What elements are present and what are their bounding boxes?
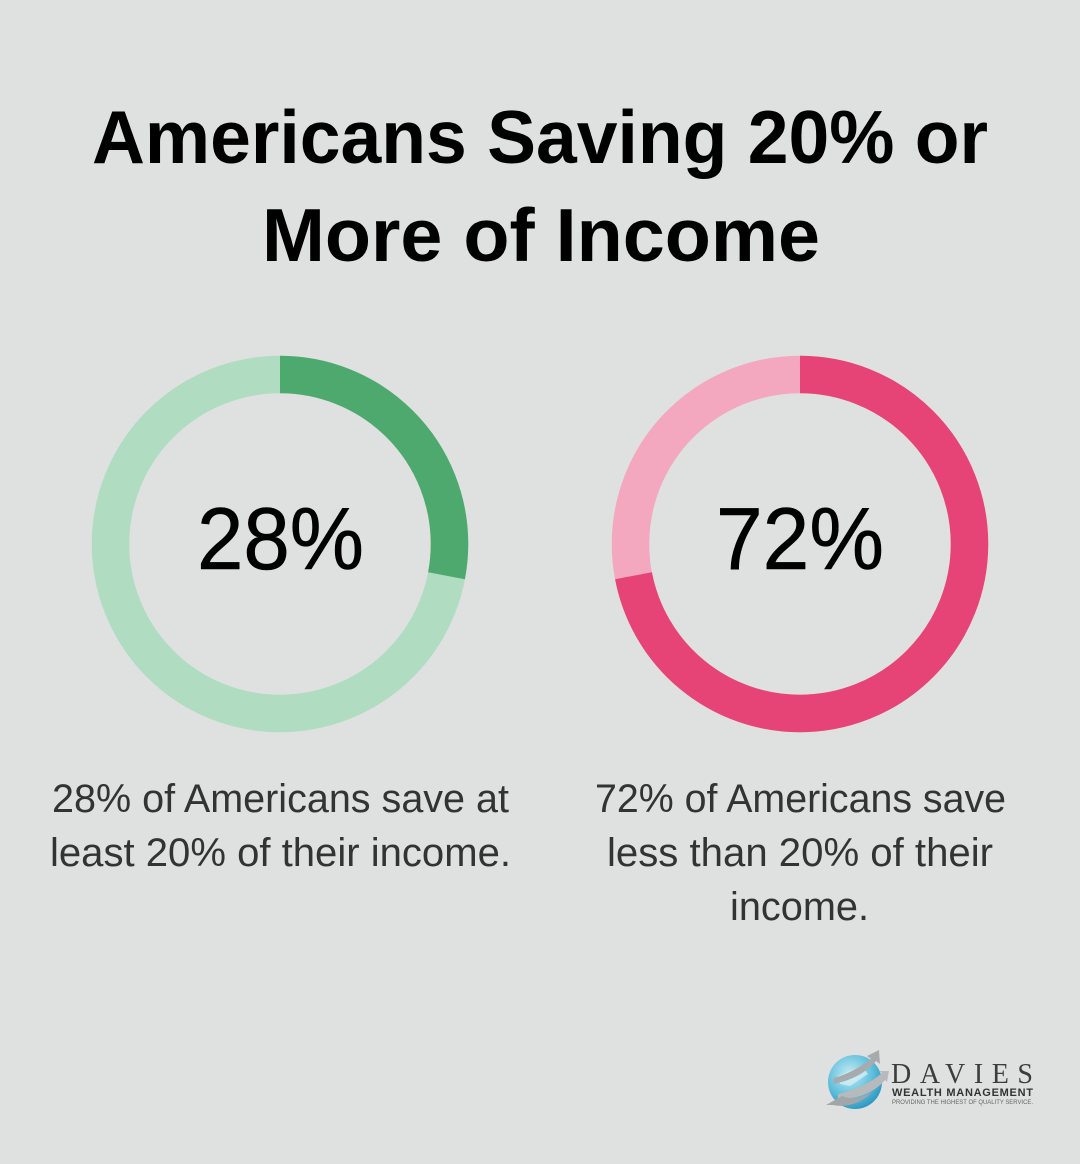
caption: 72%: less than 20% of their bbox=[607, 831, 993, 875]
panel: 72 percent saving less than 20 percent bbox=[595, 374, 1006, 929]
title bbox=[92, 95, 988, 277]
logo tagline: PROVIDING THE HIGHEST OF QUALITY SERVICE. bbox=[892, 1099, 1033, 1106]
caption: 28%: 28% of Americans save at bbox=[52, 777, 509, 821]
donut chart: 72% bbox=[630, 374, 970, 714]
caption: 28%: least 20% of their income. bbox=[50, 831, 511, 875]
caption: 72%: income. bbox=[730, 885, 869, 929]
caption: 72% bbox=[595, 777, 1006, 929]
caption: 72%: 72% of Americans save bbox=[595, 777, 1006, 821]
donut chart: 28% bbox=[110, 374, 450, 714]
caption: 28% bbox=[50, 777, 511, 875]
panel: 28 percent saving at least 20 percent bbox=[50, 374, 511, 875]
logo: Davies Wealth Management bbox=[826, 1050, 1033, 1109]
title: Americans Saving 20% or bbox=[92, 95, 988, 179]
title: More of Income bbox=[262, 193, 820, 277]
donut value: 72%: 72% bbox=[716, 489, 884, 588]
logo wordmark: DAVIES bbox=[891, 1059, 1033, 1090]
icon: globe with arrows bbox=[826, 1050, 889, 1109]
donut value: 28%: 28% bbox=[197, 489, 364, 588]
logo subtitle: WEALTH MANAGEMENT bbox=[892, 1087, 1033, 1099]
